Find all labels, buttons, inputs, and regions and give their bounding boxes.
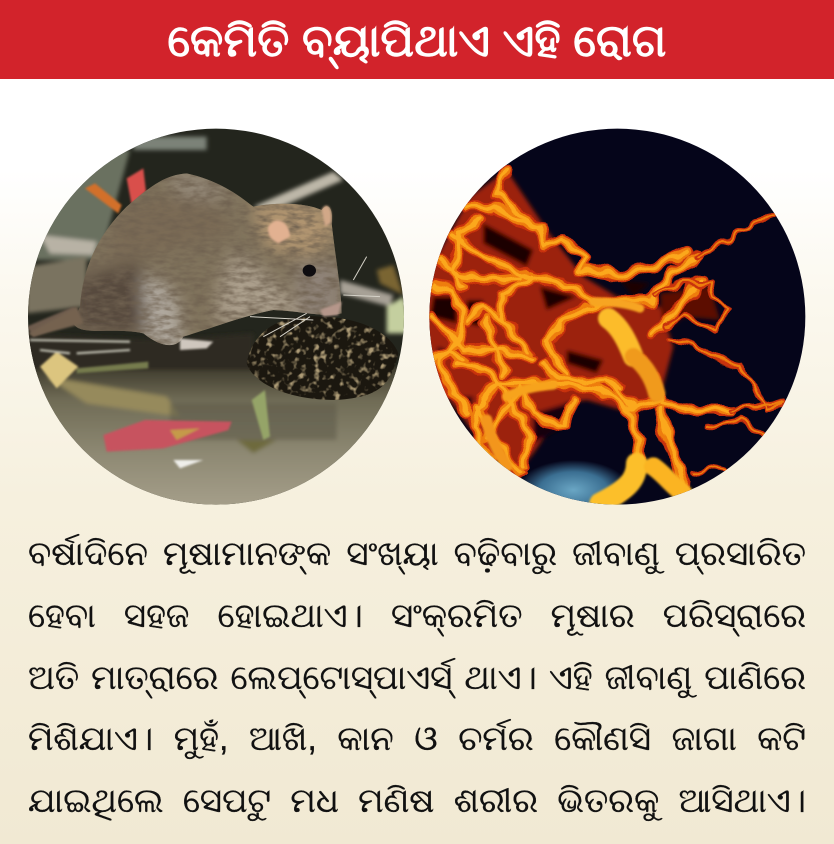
spiral strands — [430, 170, 783, 497]
body text: ଯାଇଥିଲେ ସେପଟୁ ମଧ ମଣିଷ ଶରୀର ଭିତରକୁ ଆସିଥାଏ। — [28, 782, 806, 820]
body text: ଅତି ମାତ୍ରାରେ ଲେପ୍ଟୋସ୍ପାଏର୍ସ୍ ଥାଏ। ଏହି ଜୀବାଣୁ ପାଣିରେ — [28, 659, 806, 697]
debris mound — [246, 316, 398, 400]
title: କେମିତି ବ୍ୟାପିଥାଏ ଏହି ରୋଗ — [167, 15, 667, 66]
red mass behind strands — [420, 170, 720, 473]
photo: leptospira bacteria — [429, 128, 806, 505]
title — [0, 0, 834, 79]
photo pair — [28, 128, 806, 505]
body text: ମିଶିଯାଏ। ମୁହଁ, ଆଖି, କାନ ଓ ଚର୍ମର କୌଣସି ଜାଗା କଟି — [28, 720, 806, 758]
background water and branches — [20, 137, 415, 515]
bright tangled core — [487, 302, 683, 503]
body text — [28, 534, 806, 822]
photo: rat by the water — [20, 120, 415, 515]
rat body — [74, 174, 342, 346]
body text: ବର୍ଷାଦିନେ ମୂଷାମାନଙ୍କ ସଂଖ୍ୟା ବଢ଼ିବାରୁ ଜୀବାଣୁ ପ୍ରସାରିତ — [28, 535, 806, 573]
body text: ହେବା ସହଜ ହୋଇଥାଏ। ସଂକ୍ରମିତ ମୂଷାର ପରିସ୍ରାରେ — [28, 597, 806, 635]
